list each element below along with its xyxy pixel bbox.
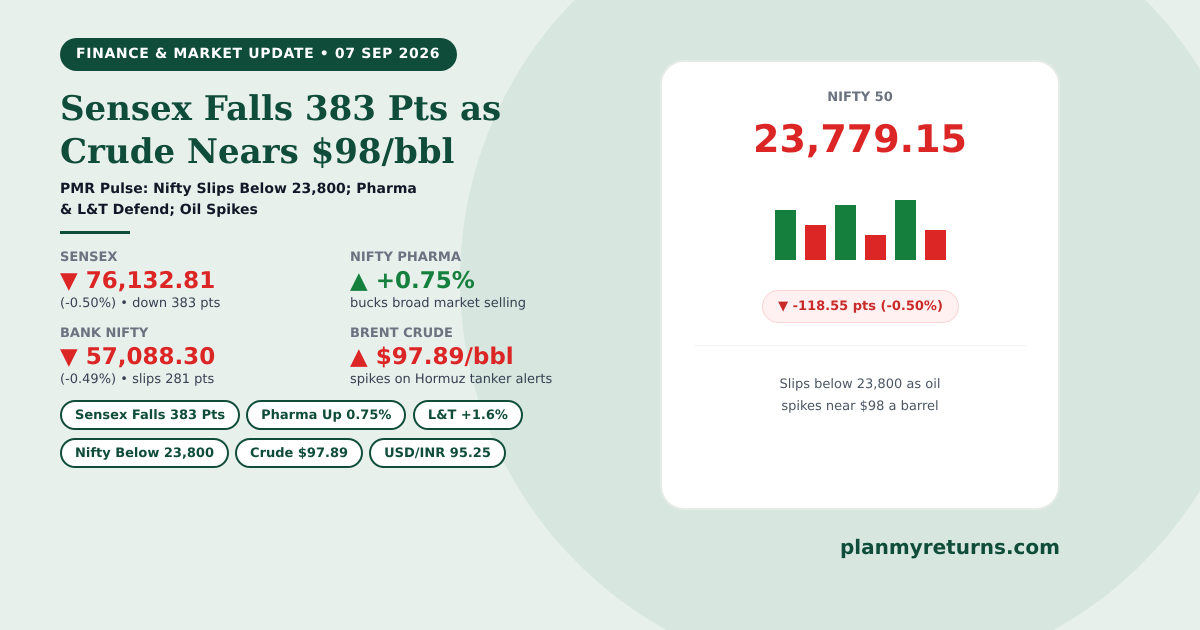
tag: Pharma <box>246 400 406 430</box>
stat: Nifty Pharma: NIFTY PHARMA <box>350 250 461 265</box>
card value: 23,779.15 <box>753 117 967 161</box>
stat: Bank Nifty: (-0.49%) • slips 281 pts <box>60 372 214 387</box>
category badge: FINANCE & MARKET UPDATE • 07 SEP 2026 <box>76 46 440 62</box>
tag: Crude: Crude $97.89 <box>250 446 348 461</box>
stat: Sensex: (-0.50%) • down 383 pts <box>60 296 220 311</box>
tag: Sensex: Sensex Falls 383 Pts <box>75 408 225 423</box>
accent rule <box>60 231 130 234</box>
divider <box>695 345 1026 346</box>
stat: Bank Nifty <box>60 326 215 387</box>
card note: spikes near $98 a barrel <box>781 399 939 414</box>
card note: Slips below 23,800 as oil <box>780 377 940 392</box>
tag: L&T: L&T +1.6% <box>428 408 508 423</box>
stat: Sensex: SENSEX <box>60 250 117 265</box>
site name: planmyreturns.com <box>840 535 1060 559</box>
card note <box>780 377 940 414</box>
tag: Nifty: Nifty Below 23,800 <box>75 446 214 461</box>
stat: Nifty Pharma: ▲ +0.75% <box>350 268 475 294</box>
title <box>60 89 501 172</box>
stat: Brent Crude <box>350 326 552 387</box>
tag row 2 <box>60 438 506 468</box>
subtitle: PMR Pulse: Nifty Slips Below 23,800; Pharma <box>60 181 417 197</box>
tag: Nifty <box>60 438 229 468</box>
tag: USD/INR <box>369 438 506 468</box>
stat: Bank Nifty: ▼ 57,088.30 <box>60 344 215 370</box>
card label: NIFTY 50 <box>827 90 893 104</box>
title: Crude Nears $98/bbl <box>60 132 454 172</box>
stat: Nifty Pharma <box>350 250 526 311</box>
stat: Brent Crude: ▲ $97.89/bbl <box>350 344 514 370</box>
stat: Brent Crude: BRENT CRUDE <box>350 326 453 341</box>
category badge <box>60 38 457 71</box>
tag: L&T <box>413 400 523 430</box>
stat: Brent Crude: spikes on Hormuz tanker alerts <box>350 372 552 387</box>
stat: Nifty Pharma: bucks broad market selling <box>350 296 526 311</box>
tag: Pharma: Pharma Up 0.75% <box>261 408 391 423</box>
subtitle <box>60 181 417 218</box>
tag: Crude <box>235 438 363 468</box>
tag: USD/INR: USD/INR 95.25 <box>384 446 491 461</box>
title: Sensex Falls 383 Pts as <box>60 89 501 129</box>
stat: Sensex: ▼ 76,132.81 <box>60 268 215 294</box>
change pill <box>762 290 959 323</box>
stat: Sensex <box>60 250 220 311</box>
bar chart <box>775 200 946 260</box>
subtitle: & L&T Defend; Oil Spikes <box>60 202 258 218</box>
tag row 1 <box>60 400 523 430</box>
tag: Sensex <box>60 400 240 430</box>
change pill: ▼ -118.55 pts (-0.50%) <box>778 299 943 314</box>
panel: Nifty 50 card <box>660 60 1060 510</box>
stat: Bank Nifty: BANK NIFTY <box>60 326 148 341</box>
